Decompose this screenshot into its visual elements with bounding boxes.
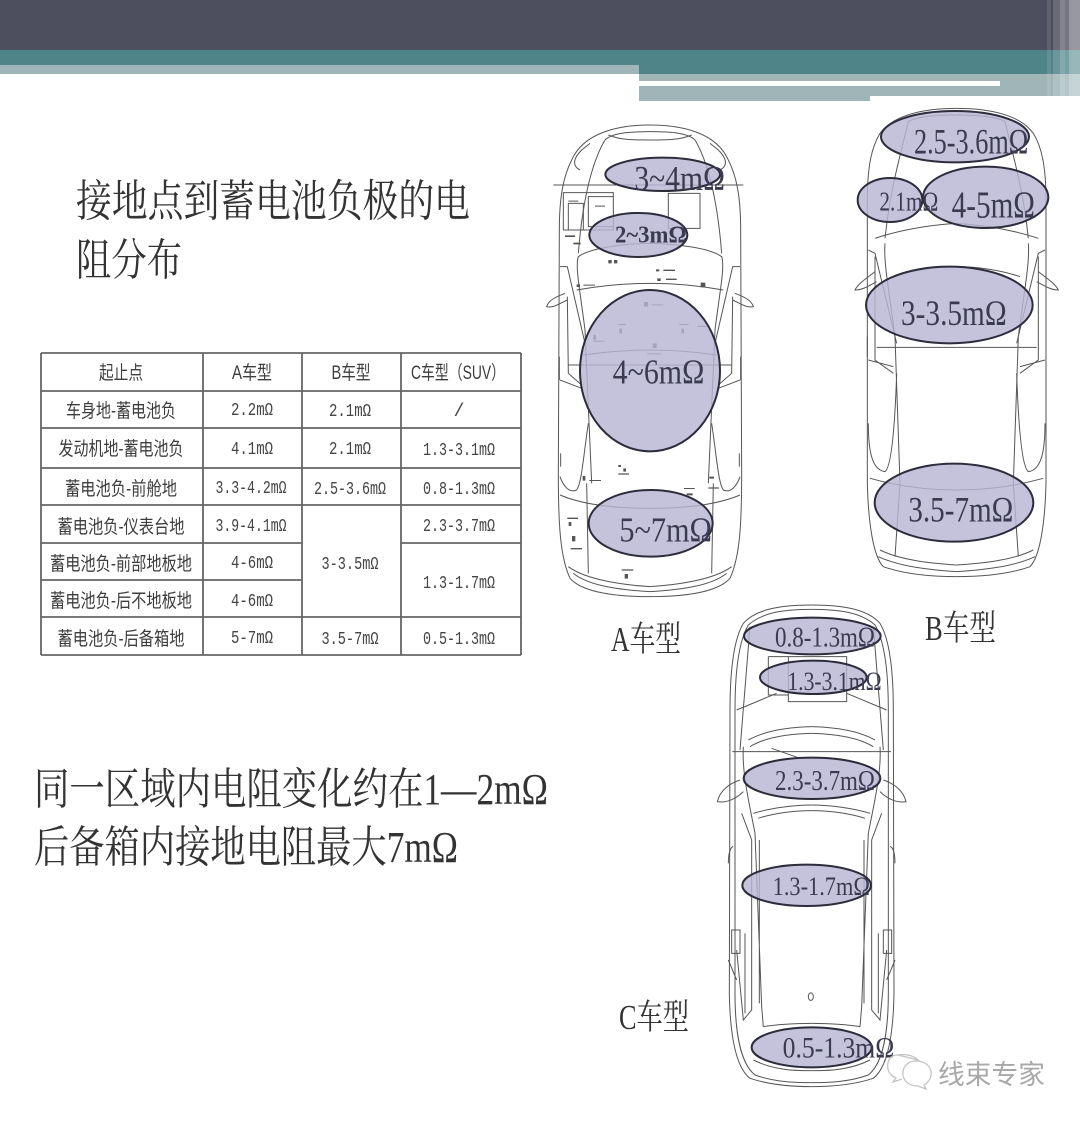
watermark bbox=[888, 1055, 1045, 1090]
resistance table: 4-6mΩ bbox=[231, 592, 273, 612]
watermark: 线束专家 bbox=[938, 1060, 1045, 1090]
resistance table: 3-3.5mΩ bbox=[322, 555, 379, 575]
car A zones: 3~4mΩ bbox=[634, 159, 725, 198]
header band bbox=[0, 0, 1080, 101]
title: 接地点到蓄电池负极的电 bbox=[76, 177, 470, 226]
resistance table: 1.3-3.1mΩ bbox=[423, 441, 495, 461]
car B zones: 2.1mΩ bbox=[879, 187, 938, 217]
resistance table: 2.1mΩ bbox=[329, 440, 371, 460]
resistance table: 起止点 bbox=[99, 362, 143, 384]
title: 阻分布 bbox=[76, 236, 182, 285]
car B zones: 3.5-7mΩ bbox=[908, 490, 1013, 530]
car C zones: 2.3-3.7mΩ bbox=[775, 766, 875, 797]
resistance table: 3.9-4.1mΩ bbox=[216, 517, 287, 537]
car B zones: 3-3.5mΩ bbox=[901, 293, 1007, 333]
resistance table: 发动机地-蓄电池负 bbox=[58, 438, 184, 460]
car B label: B车型 bbox=[925, 609, 996, 648]
car B diagram bbox=[855, 108, 1058, 577]
resistance table: 蓄电池负-前部地板地 bbox=[50, 553, 192, 575]
resistance table: / bbox=[454, 402, 464, 422]
resistance table: 0.8-1.3mΩ bbox=[423, 480, 495, 500]
car B zones bbox=[858, 111, 1048, 542]
summary text: 同一区域内电阻变化约在1—2mΩ bbox=[34, 765, 548, 814]
resistance table: 蓄电池负-前舱地 bbox=[65, 478, 177, 500]
car B zones: 2.5-3.6mΩ bbox=[914, 121, 1028, 161]
car C zones: 1.3-1.7mΩ bbox=[773, 871, 870, 901]
summary text bbox=[34, 765, 548, 872]
car C zones: 0.5-1.3mΩ bbox=[783, 1032, 894, 1064]
title bbox=[76, 177, 470, 285]
car C zones bbox=[742, 618, 894, 1067]
car B zones: 4-5mΩ bbox=[952, 184, 1035, 226]
resistance table: 2.1mΩ bbox=[329, 402, 371, 422]
resistance table: C车型（SUV） bbox=[411, 362, 505, 384]
resistance table: 4-6mΩ bbox=[231, 554, 273, 574]
resistance table: 4.1mΩ bbox=[231, 440, 273, 460]
resistance table: 1.3-1.7mΩ bbox=[423, 574, 495, 594]
car C zones: 0.8-1.3mΩ bbox=[775, 623, 875, 654]
resistance table: 蓄电池负-后备箱地 bbox=[58, 628, 184, 650]
resistance table: 3.5-7mΩ bbox=[322, 630, 379, 650]
car C zones: 1.3-3.1mΩ bbox=[787, 666, 882, 696]
car A zones: 2~3mΩ bbox=[615, 223, 687, 249]
icon: chat bubbles bbox=[888, 1055, 931, 1089]
resistance table: 2.3-3.7mΩ bbox=[423, 517, 495, 537]
car C label: C车型 bbox=[619, 998, 689, 1037]
resistance table bbox=[41, 353, 521, 655]
car A zones: 5~7mΩ bbox=[619, 511, 712, 550]
resistance table: 车身地-蓄电池负 bbox=[66, 400, 176, 422]
car A zones: 4~6mΩ bbox=[613, 352, 704, 391]
resistance table: B车型 bbox=[332, 362, 370, 384]
car A label: A车型 bbox=[611, 620, 681, 659]
resistance table: 0.5-1.3mΩ bbox=[423, 630, 495, 650]
resistance table: 蓄电池负-后不地板地 bbox=[50, 590, 192, 612]
resistance table: 蓄电池负-仪表台地 bbox=[58, 516, 184, 538]
resistance table: A车型 bbox=[232, 362, 272, 384]
car A diagram bbox=[547, 125, 753, 597]
summary text: 后备箱内接地电阻最大7mΩ bbox=[34, 823, 458, 872]
car A zones bbox=[580, 158, 725, 557]
resistance table: 5-7mΩ bbox=[231, 629, 273, 649]
car C diagram bbox=[717, 605, 906, 1087]
resistance table: 3.3-4.2mΩ bbox=[216, 479, 287, 499]
resistance table: 2.5-3.6mΩ bbox=[314, 480, 386, 500]
resistance table: 2.2mΩ bbox=[231, 401, 273, 421]
